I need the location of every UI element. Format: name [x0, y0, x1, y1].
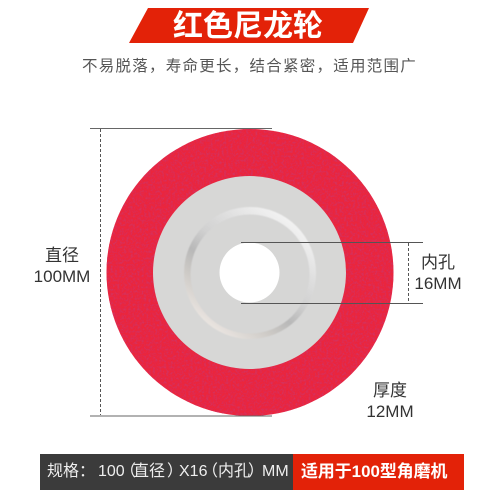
diameter dimension lines — [90, 128, 272, 416]
label: inner hole: 16MM — [414, 274, 462, 293]
spec text: （ — [120, 463, 136, 480]
label: inner hole — [414, 253, 462, 293]
spec text: 内孔 — [218, 463, 250, 480]
label: thickness — [366, 381, 414, 421]
spec text: ） — [248, 463, 264, 480]
label: diameter — [34, 246, 90, 286]
application text — [293, 454, 464, 490]
title banner — [129, 8, 369, 43]
spec text: 直径 — [133, 463, 165, 480]
spec text — [40, 454, 293, 490]
spec text: 规格： — [47, 463, 95, 480]
label: inner hole: 内孔 — [421, 253, 455, 272]
inner hole dimension lines — [241, 242, 423, 304]
label: diameter: 100MM — [34, 267, 90, 286]
centre hole — [220, 242, 280, 302]
application text: 适用于100型角磨机 — [301, 462, 447, 481]
spec text: ） — [167, 463, 183, 480]
label: thickness: 厚度 — [373, 381, 407, 400]
label: diameter: 直径 — [45, 246, 79, 265]
spec text: （ — [202, 463, 218, 480]
spec text: X16 — [179, 463, 207, 480]
spec text: 100 — [98, 463, 125, 480]
subtitle: 不易脱落，寿命更长，结合紧密，适用范围广 — [82, 58, 417, 75]
grey hub plate — [153, 176, 346, 369]
red nylon disc — [106, 129, 394, 416]
label: thickness: 12MM — [366, 402, 414, 421]
spec bar — [40, 454, 464, 490]
spec text: MM — [262, 463, 289, 480]
title text: 红色尼龙轮 — [173, 10, 323, 43]
